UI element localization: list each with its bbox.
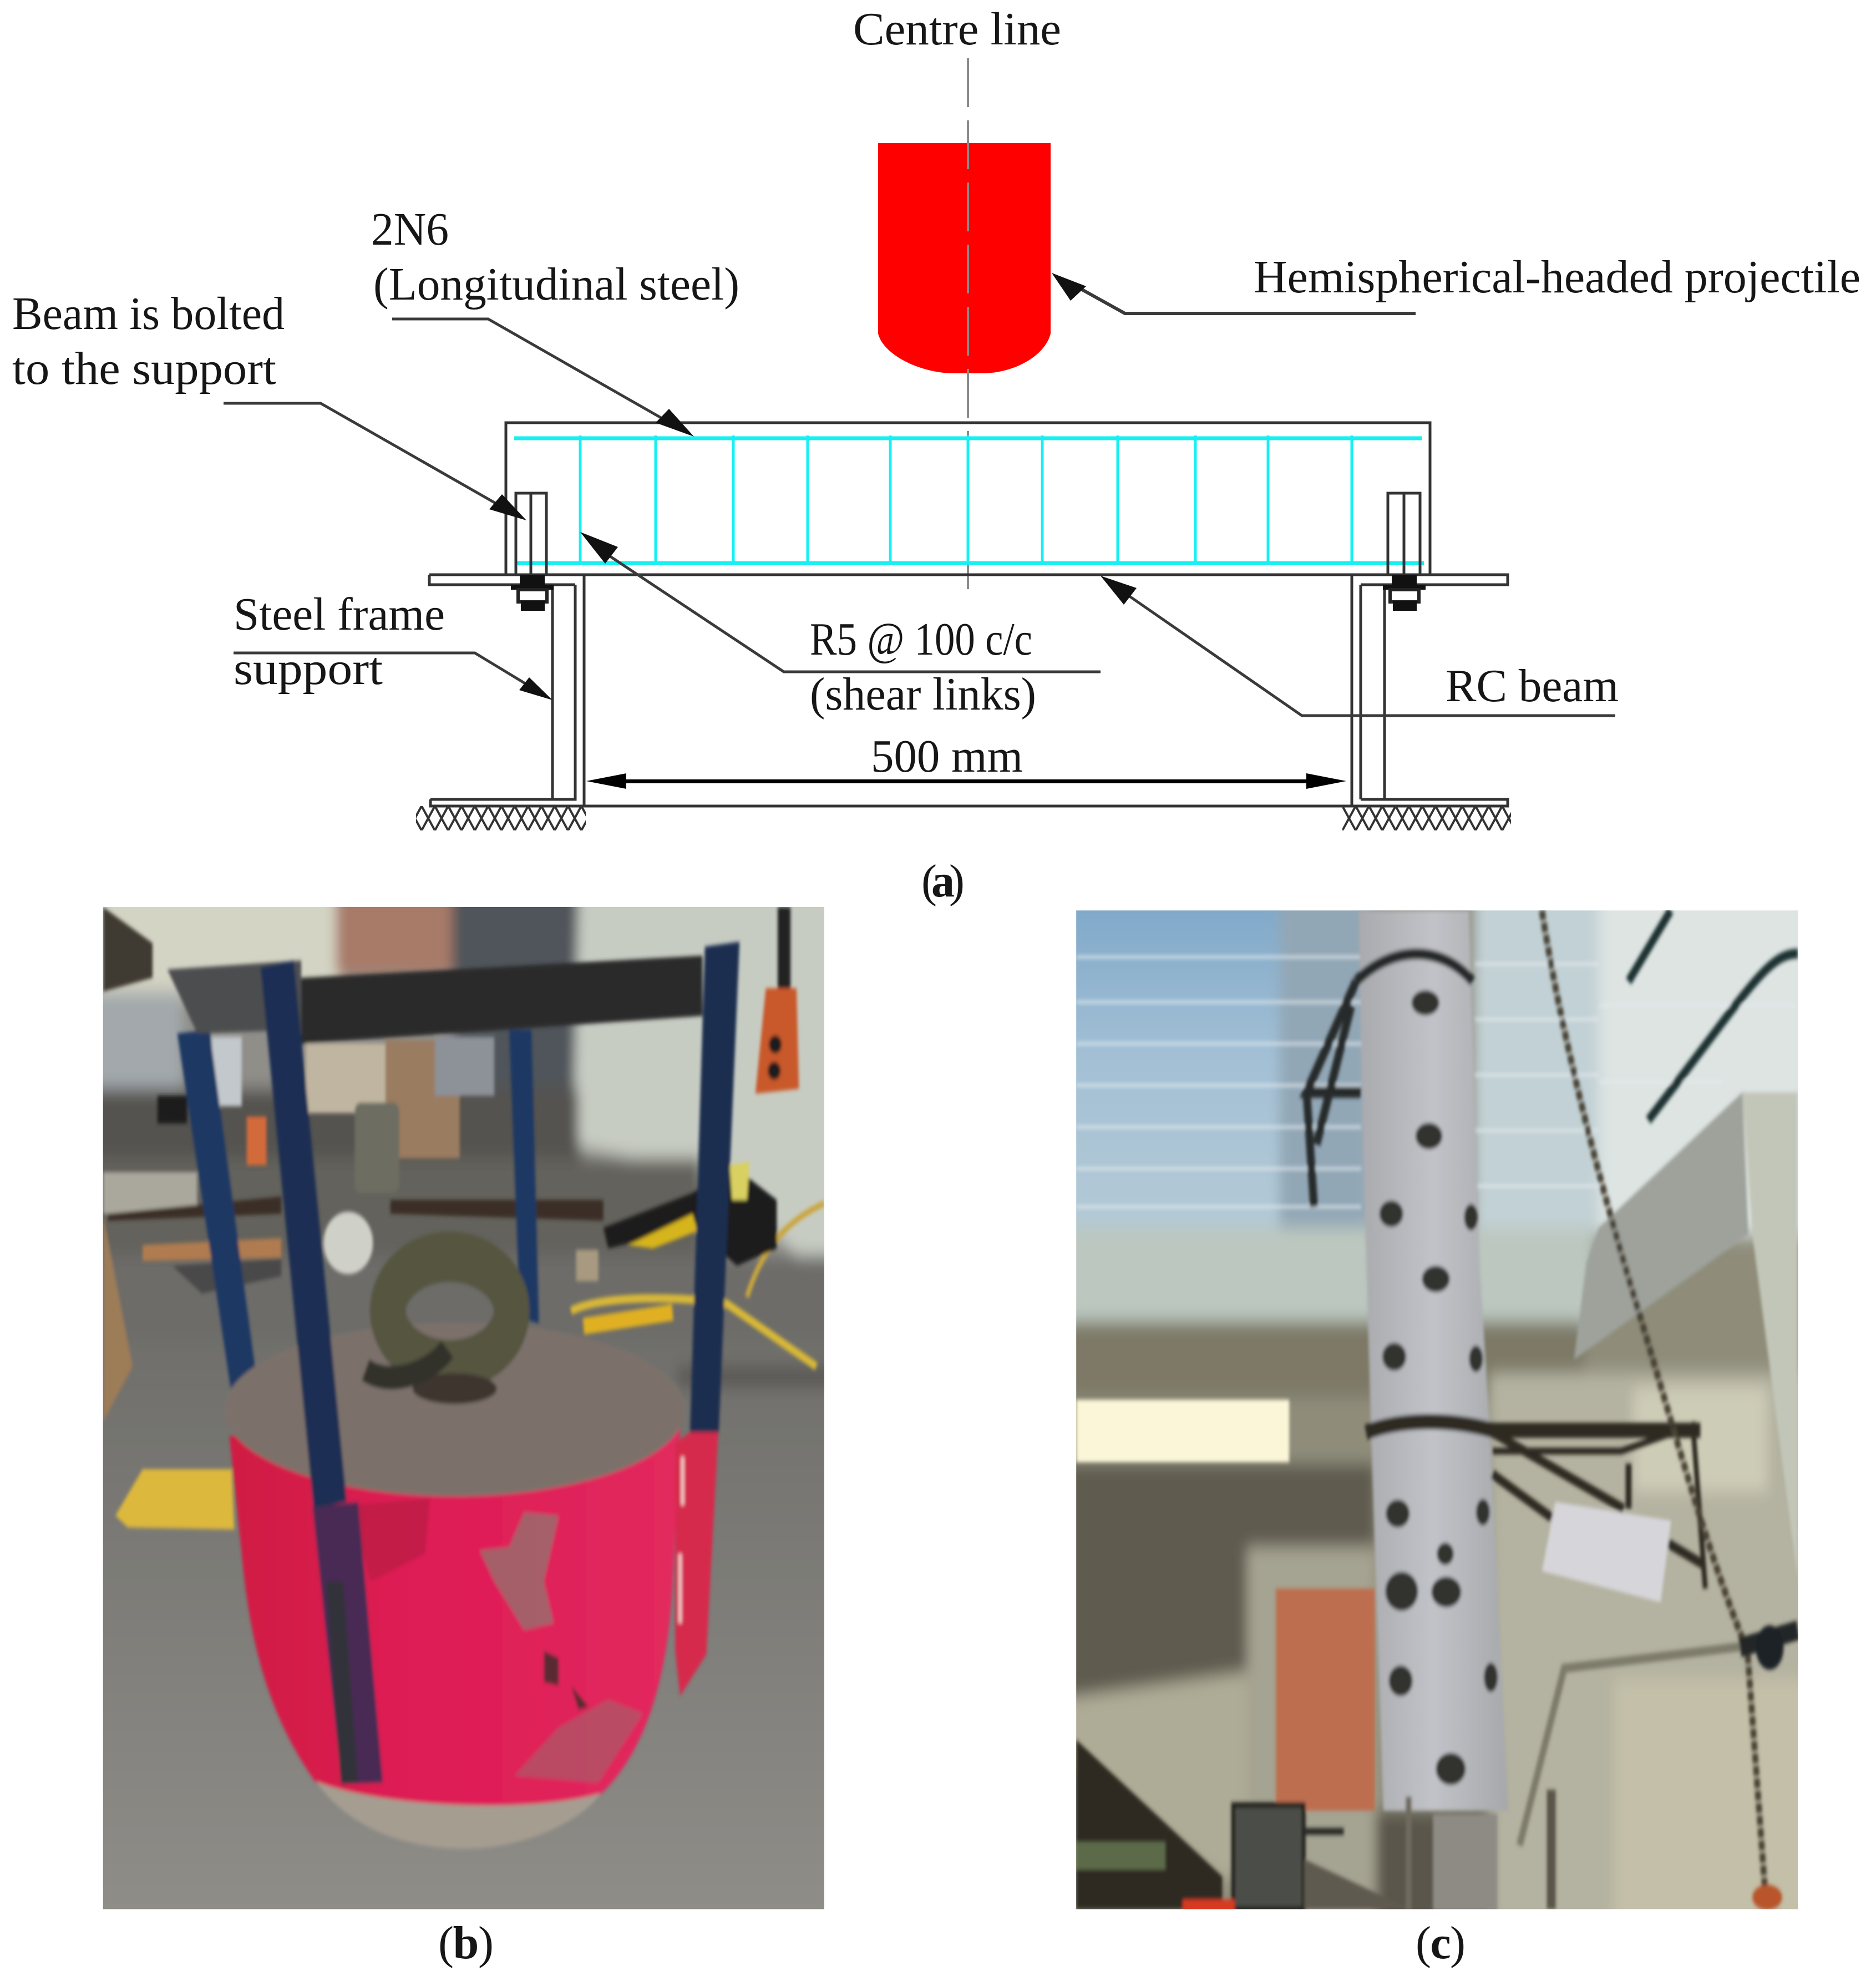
control pendant: orange box bbox=[756, 907, 799, 1094]
caption: (a): (a) bbox=[921, 855, 965, 907]
centre line: dashed axis bbox=[967, 58, 969, 589]
projectile: red hemispherical head bbox=[878, 143, 1051, 373]
leader: shear links bbox=[580, 532, 1101, 672]
projectile: damage patches bbox=[479, 1512, 643, 1783]
bright light band bbox=[1076, 1400, 1289, 1462]
panel a: beam test setup diagram bbox=[12, 3, 1860, 907]
chain bbox=[1542, 910, 1765, 1887]
frame: front left post bbox=[261, 960, 347, 1509]
label: RC beam: RC beam bbox=[1446, 660, 1619, 712]
label: R5 @ 100 c/c: R5 @ 100 c/c bbox=[810, 614, 1032, 665]
leader: beam bolted bbox=[224, 403, 526, 520]
frame: strap dark edge bbox=[326, 1582, 358, 1783]
label: shear links: (shear links) bbox=[810, 668, 1036, 720]
projectile: top face bbox=[225, 1323, 685, 1496]
brick wall courses bbox=[1076, 957, 1797, 1207]
tube ventilation holes bbox=[1380, 990, 1498, 1785]
frame: strap on cylinder bbox=[312, 1502, 383, 1784]
label: Longitudinal steel: (Longitudinal steel) bbox=[373, 259, 739, 310]
leader: longitudinal steel bbox=[392, 319, 694, 437]
label: Hemispherical-headed projectile: Hemispherical-headed projectile bbox=[1254, 251, 1860, 303]
bracket pipes top right bbox=[1629, 910, 1798, 1120]
frame: rear posts bbox=[178, 1030, 539, 1396]
leader: steel frame bbox=[234, 653, 552, 700]
panel c: photograph of launch tube bbox=[1054, 888, 1817, 1928]
paper sheet bbox=[1542, 1502, 1671, 1603]
background clutter: machinery and tools bbox=[103, 907, 824, 1529]
launch tube bbox=[1358, 910, 1508, 1811]
label: 500 mm: 500 mm bbox=[871, 731, 1023, 782]
RC beam and steel frame support outlines bbox=[429, 423, 1508, 806]
pipe and red weight bbox=[1519, 1625, 1798, 1910]
label: 2N6: 2N6 bbox=[371, 204, 449, 255]
projectile: pink cylinder body bbox=[229, 1429, 680, 1809]
reinforcement: longitudinal steel and shear links bbox=[514, 435, 1424, 563]
frame: hinge highlight bbox=[680, 1457, 683, 1623]
ground hatching right bbox=[1342, 806, 1511, 830]
label: support: support bbox=[234, 643, 383, 695]
exposed brick patch bbox=[1276, 1589, 1375, 1811]
shadow wedge bottom left bbox=[1076, 1740, 1223, 1909]
tube top strap and bracket bbox=[1306, 954, 1473, 1207]
dimension arrow: 500 mm bbox=[586, 773, 1346, 789]
frame: left bar section bbox=[168, 960, 301, 1033]
projectile: worn nose bbox=[316, 1781, 601, 1849]
ground hatching left bbox=[416, 806, 586, 830]
lifting eye ring bbox=[366, 1257, 511, 1404]
frame: right post bbox=[690, 942, 739, 1432]
label: Beam is bolted: Beam is bolted bbox=[12, 288, 285, 340]
photo background: brick wall, beam and shadows bbox=[1054, 888, 1817, 1928]
background: concrete wall on right bbox=[1574, 1092, 1798, 1582]
test equipment at tube base bbox=[1076, 1790, 1556, 1913]
photo background: workshop walls and floor bbox=[83, 888, 846, 1928]
lower strap and bracket bbox=[1366, 1422, 1705, 1589]
label: Centre line: Centre line bbox=[853, 3, 1061, 55]
projectile: shadow on body bbox=[351, 1498, 430, 1582]
frame: horizontal bar bbox=[301, 956, 702, 1043]
leader: RC beam bbox=[1101, 576, 1615, 716]
label: Steel frame: Steel frame bbox=[234, 589, 445, 640]
left bolt bbox=[511, 575, 554, 611]
caption: (b): (b) bbox=[438, 1917, 494, 1969]
caption: (c): (c) bbox=[1416, 1917, 1466, 1969]
right bolt bbox=[1383, 575, 1426, 611]
panel b: photograph of projectile bbox=[83, 888, 846, 1928]
frame: right red strap bbox=[675, 1432, 718, 1696]
label: to the support: to the support bbox=[12, 343, 276, 394]
leader: projectile bbox=[1052, 273, 1416, 313]
